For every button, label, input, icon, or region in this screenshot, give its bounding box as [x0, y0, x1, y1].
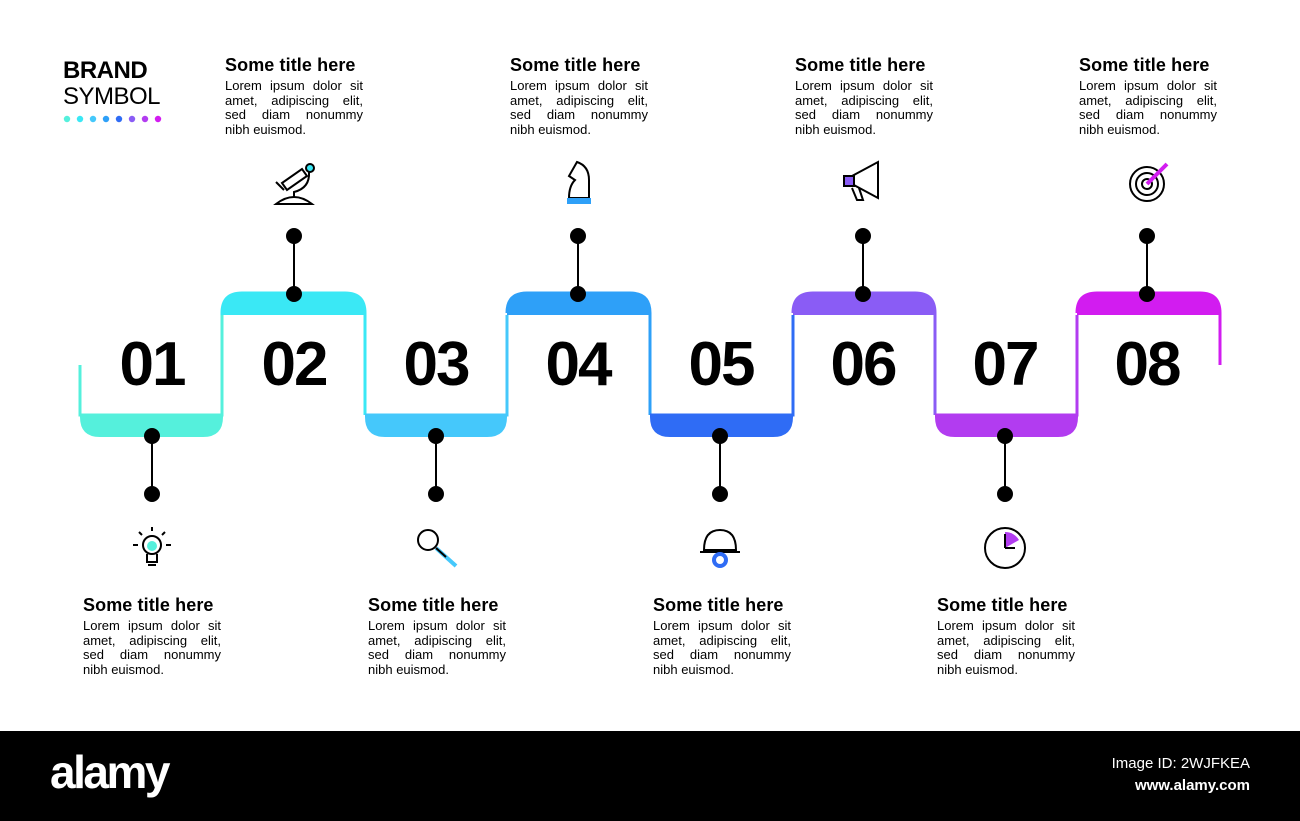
text: step 6: Lorem ipsum dolor sit	[795, 78, 933, 93]
text: step 3: sed diam nonummy	[368, 647, 506, 662]
text: step 6: sed diam nonummy	[795, 107, 933, 122]
text: step 7: Lorem ipsum dolor sit	[937, 618, 1075, 633]
icon: megaphone	[844, 162, 878, 200]
text: step 6: Some title here	[795, 55, 926, 75]
text: step 8: Some title here	[1079, 55, 1210, 75]
text: step 1: nibh euismod.	[83, 662, 164, 676]
text: 08	[1115, 330, 1179, 399]
icon: chess knight	[567, 162, 591, 204]
image id: www.alamy.com	[1135, 777, 1250, 794]
icon: clock	[985, 528, 1025, 568]
text: 05	[689, 330, 753, 399]
text: step 1: amet, adipiscing elit,	[83, 632, 221, 648]
text: step 5: Some title here	[653, 595, 784, 615]
alamy logo: alamy	[50, 746, 168, 798]
text: 03	[404, 330, 468, 399]
text: step 3	[368, 595, 506, 676]
text: step 7: amet, adipiscing elit,	[937, 632, 1075, 648]
text: step 7: Some title here	[937, 595, 1068, 615]
numbers: 01	[120, 330, 184, 399]
text: step 7: nibh euismod.	[937, 662, 1018, 676]
brand logo: BRAND	[63, 57, 147, 84]
text: step 8: nibh euismod.	[1079, 122, 1160, 136]
text: step 6	[795, 55, 933, 136]
text: step 1: Some title here	[83, 595, 214, 615]
text: step 4: amet, adipiscing elit,	[510, 92, 648, 108]
text: step 5: sed diam nonummy	[653, 647, 791, 662]
icon: magnifier	[418, 530, 456, 566]
text: 04	[546, 330, 610, 399]
text: step 2: nibh euismod.	[225, 122, 306, 136]
icon: bulb	[133, 527, 171, 565]
text: step 4: Lorem ipsum dolor sit	[510, 78, 648, 93]
footer bar	[0, 731, 1300, 821]
text: 07	[973, 330, 1037, 399]
text: step 5: nibh euismod.	[653, 662, 734, 676]
text: step 2: Some title here	[225, 55, 356, 75]
text: step 3: Some title here	[368, 595, 499, 615]
image id: Image ID: 2WJFKEA	[1112, 755, 1250, 772]
text: step 7	[937, 595, 1075, 676]
text: step 2	[225, 55, 363, 136]
icon: target	[1130, 164, 1167, 201]
text: step 2: Lorem ipsum dolor sit	[225, 78, 363, 93]
brand logo	[63, 57, 162, 122]
image id	[1112, 755, 1250, 794]
text: step 6: amet, adipiscing elit,	[795, 92, 933, 108]
text: step 8: sed diam nonummy	[1079, 107, 1217, 122]
text: step 1	[83, 595, 221, 676]
text: step 8: amet, adipiscing elit,	[1079, 92, 1217, 108]
text: step 8: Lorem ipsum dolor sit	[1079, 78, 1217, 93]
text: step 3: amet, adipiscing elit,	[368, 632, 506, 648]
text: step 4: Some title here	[510, 55, 641, 75]
icon: microscope	[276, 164, 314, 204]
text: step 7: sed diam nonummy	[937, 647, 1075, 662]
text: 06	[831, 330, 895, 399]
text: step 5: amet, adipiscing elit,	[653, 632, 791, 648]
brand logo: SYMBOL	[63, 83, 160, 110]
text: 02	[262, 330, 326, 399]
text: step 3: nibh euismod.	[368, 662, 449, 676]
text: step 5: Lorem ipsum dolor sit	[653, 618, 791, 633]
text: step 1: sed diam nonummy	[83, 647, 221, 662]
icon: helmet	[700, 530, 740, 566]
text: step 5	[653, 595, 791, 676]
text: step 2: amet, adipiscing elit,	[225, 92, 363, 108]
text: step 4	[510, 55, 648, 136]
connectors	[145, 229, 1154, 501]
text: step 3: Lorem ipsum dolor sit	[368, 618, 506, 633]
text: step 2: sed diam nonummy	[225, 107, 363, 122]
text: step 1: Lorem ipsum dolor sit	[83, 618, 221, 633]
text: step 4: sed diam nonummy	[510, 107, 648, 122]
icons	[133, 162, 1167, 568]
text: step 8	[1079, 55, 1217, 136]
text: step 6: nibh euismod.	[795, 122, 876, 136]
text: step 4: nibh euismod.	[510, 122, 591, 136]
